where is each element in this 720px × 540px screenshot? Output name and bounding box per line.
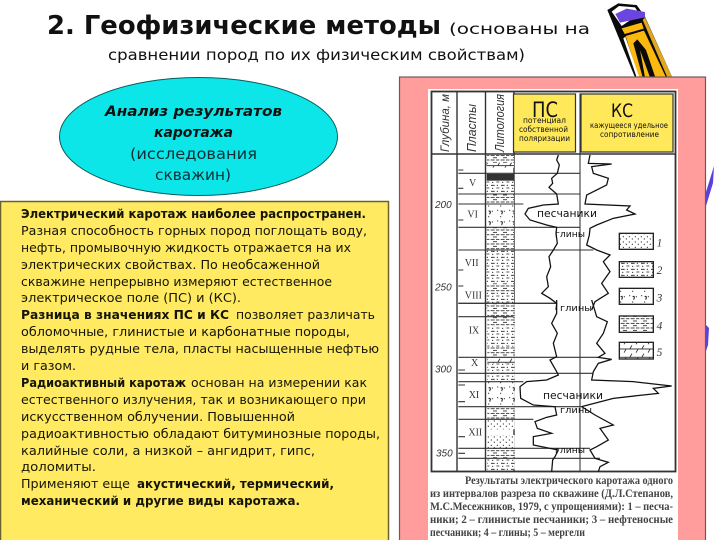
chart legend: 4 xyxy=(657,320,663,332)
chart legend: 5 xyxy=(657,347,663,359)
ellipse callout: log analysis: скважин) xyxy=(155,166,231,184)
panel: yellow text block: и газом. xyxy=(21,359,76,373)
chart lower half drawing: XII xyxy=(468,427,482,438)
panel: yellow text block: скважине непрерывно измеряют естественное xyxy=(21,275,332,289)
panel: yellow text block xyxy=(0,202,388,540)
chart column headers: Глубина, м xyxy=(438,94,452,152)
panel: yellow text block: Разная способность горных пород поглощать воду, xyxy=(21,224,367,238)
chart column headers xyxy=(431,92,675,472)
chart caption xyxy=(430,475,673,539)
panel: well log chart xyxy=(428,89,678,540)
chart upper half drawing: VIII xyxy=(465,291,482,302)
panel: yellow text block: Электрический каротаж наиболее распространен. xyxy=(21,207,366,221)
chart caption: М.С.Месежников, 1979, с упрощениями): 1 – песча- xyxy=(430,501,673,513)
panel: yellow text block: обломочные, глинистые и карбонатные породы, xyxy=(21,325,350,339)
box: PS header: поляризации xyxy=(519,134,570,143)
box: KS header: сопротивление xyxy=(600,130,659,139)
panel: yellow text block: позволяет различать xyxy=(236,308,375,322)
panel: yellow text block: Разница в значениях ПС и КС xyxy=(21,308,229,322)
panel: yellow text block: нефть, промывочную жидкость отражается на их xyxy=(21,241,351,255)
title: сравнении пород по их физическим свойствам) xyxy=(108,46,525,64)
chart upper half drawing: 250 xyxy=(434,283,452,294)
ellipse callout: log analysis: Анализ результатов xyxy=(104,104,282,120)
title: (основаны на xyxy=(449,20,590,38)
panel: yellow text block: радиоактивностью обладают битуминозные породы, xyxy=(21,427,380,441)
box: PS header: ПС xyxy=(532,98,558,122)
box: KS header: КС xyxy=(611,100,633,122)
panel: yellow text block: выделять рудные тела, пласты насыщенные нефтью xyxy=(21,342,379,356)
panel: yellow text block: естественного излучения, так и возникающего при xyxy=(21,393,366,407)
panel: yellow text block: механический и другие виды каротажа. xyxy=(21,494,300,508)
chart legend: 1 xyxy=(657,238,662,250)
chart caption: из интервалов разреза по скважине (Д.Л.Степанов, xyxy=(430,488,673,500)
box: PS header: потенциал xyxy=(523,116,566,125)
box: PS header xyxy=(514,94,576,152)
ellipse callout: log analysis: каротажа xyxy=(154,125,233,141)
panel: yellow text block: Применяют еще xyxy=(21,477,130,491)
ellipse callout: log analysis: (исследования xyxy=(130,145,257,163)
panel: yellow text block: доломиты. xyxy=(21,460,96,474)
box: KS header: кажущееся удельное xyxy=(590,121,668,130)
box: KS header xyxy=(581,94,673,152)
chart upper half drawing: VI xyxy=(467,209,478,220)
rock labels on curves: глины xyxy=(560,406,592,416)
chart upper half drawing: VII xyxy=(465,258,479,269)
rock labels on curves: песчаники xyxy=(537,207,597,220)
rock labels on curves xyxy=(537,207,603,456)
chart upper half drawing: V xyxy=(469,178,477,189)
panel: pink frame xyxy=(400,77,706,540)
rock labels on curves: глины xyxy=(560,304,592,314)
chart lower half drawing: 350 xyxy=(436,449,453,460)
chart upper half drawing: 200 xyxy=(434,200,452,211)
chart column headers: Пласты xyxy=(464,104,479,152)
chart lower half drawing: IX xyxy=(469,325,480,336)
panel: yellow text block: акустический, термический, xyxy=(137,477,334,491)
chart lower half drawing: 300 xyxy=(435,365,452,376)
chart lower half drawing: XI xyxy=(469,390,479,401)
chart caption: песчаники; 4 – глины; 5 – мергели xyxy=(430,527,585,539)
title: 2. Геофизические методы xyxy=(47,11,441,41)
chart upper half drawing xyxy=(434,93,635,310)
chart lower half drawing: X xyxy=(471,358,479,369)
chart caption: ники; 2 – глинистые песчаники; 3 – нефтеносные xyxy=(430,514,673,526)
chart legend: 3 xyxy=(656,293,663,305)
chart column headers: Литология xyxy=(492,94,507,153)
chart legend: 2 xyxy=(657,265,663,277)
panel: yellow text block: калийные соли, а низкой – ангидрит, гипс, xyxy=(21,444,315,458)
box: PS header: собственной xyxy=(519,125,568,134)
panel: yellow text block: основан на измерении как xyxy=(191,376,367,390)
rock labels on curves: глины xyxy=(555,230,585,240)
chart lower half drawing xyxy=(435,300,672,472)
icon: pencil xyxy=(607,3,672,77)
panel: yellow text block: искусственном облучении. Повышенной xyxy=(21,410,295,424)
panel: yellow text block: электрических свойствах. По необсаженной xyxy=(21,258,320,272)
chart caption: Результаты электрического каротажа одного xyxy=(465,475,673,487)
panel: yellow text block: Радиоактивный каротаж xyxy=(21,376,186,390)
title xyxy=(47,11,590,64)
chart legend xyxy=(619,233,663,359)
panel: yellow text block: электрическое поле (ПС) и (КС). xyxy=(21,291,241,305)
rock labels on curves: глины xyxy=(555,446,585,456)
ellipse callout: log analysis xyxy=(60,78,338,196)
rock labels on curves: песчаники xyxy=(543,389,603,402)
icon: blue pencil fragments xyxy=(706,166,714,351)
